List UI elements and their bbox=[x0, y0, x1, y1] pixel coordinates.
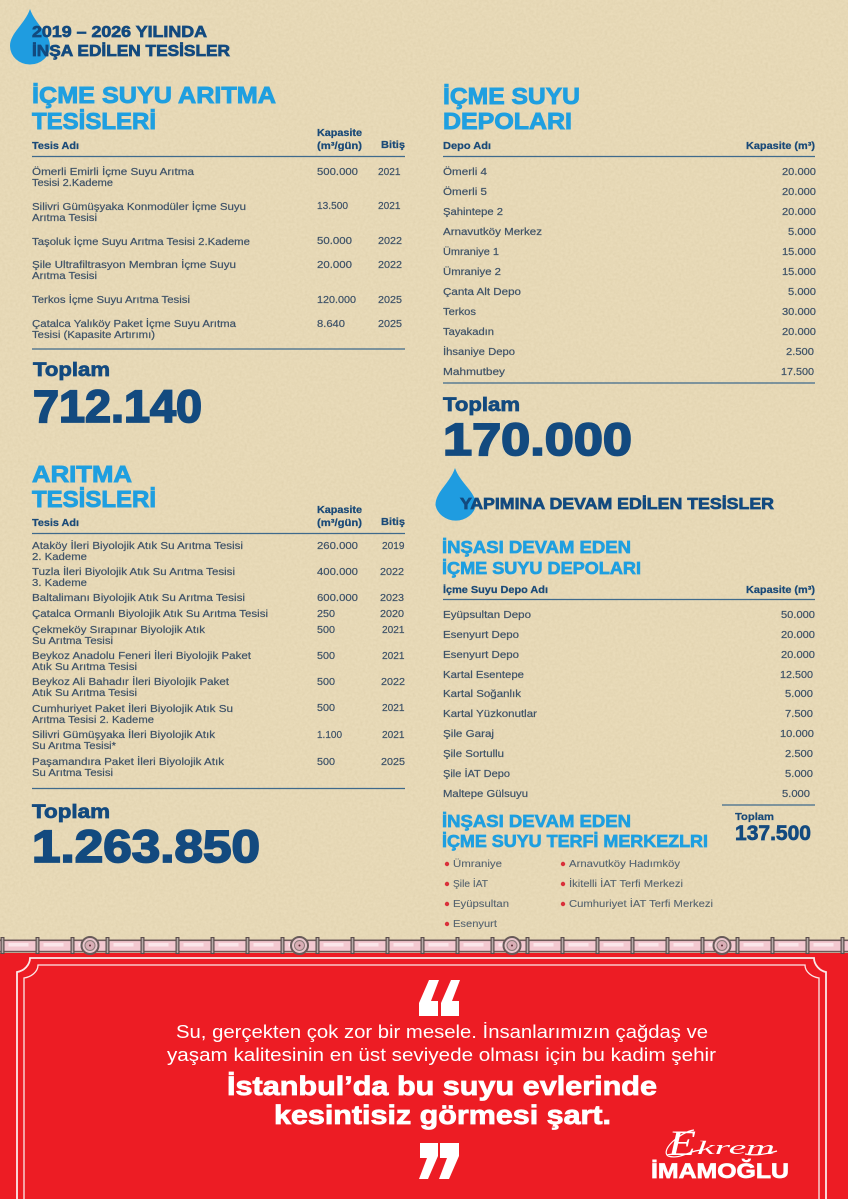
table rows: Şile İAT Depo bbox=[443, 767, 510, 780]
panel: drinking water reservoirs bbox=[443, 83, 816, 465]
table rows: Tayakadın bbox=[443, 327, 494, 338]
bullet list: Esenyurt bbox=[453, 919, 497, 930]
table rows: Su Arıtma Tesisi bbox=[32, 768, 113, 779]
table rows: 15.000 bbox=[782, 247, 816, 258]
table rows: Çatalca Yalıköy Paket İçme Suyu Arıtma bbox=[32, 317, 236, 330]
table header: Kapasite (m³) bbox=[746, 584, 815, 596]
total: Toplam bbox=[33, 360, 110, 381]
table rows: 500 bbox=[317, 651, 335, 662]
heading bbox=[442, 537, 641, 578]
table rows bbox=[32, 165, 405, 349]
quote text: kesintisiz görmesi şart. bbox=[274, 1100, 611, 1130]
table rows: 3. Kademe bbox=[32, 578, 87, 589]
table rows: Şahintepe 2 bbox=[443, 207, 503, 218]
table rows: Çanta Alt Depo bbox=[443, 287, 522, 298]
table rows: Eyüpsultan Depo bbox=[443, 610, 531, 621]
table rows: 1.100 bbox=[317, 730, 342, 741]
signature: İMAMOĞLU bbox=[651, 1158, 789, 1183]
table rows: Şile Sortullu bbox=[443, 749, 504, 760]
table rows: 500 bbox=[317, 625, 335, 636]
table header: Kapasite bbox=[317, 127, 362, 139]
table rows: Silivri Gümüşyaka Konmodüler İçme Suyu bbox=[32, 200, 246, 213]
table rows: 2022 bbox=[381, 677, 405, 688]
table rows: 20.000 bbox=[782, 327, 816, 338]
table rows: 20.000 bbox=[317, 260, 352, 271]
table rows: 30.000 bbox=[782, 307, 816, 318]
table rows: 2021 bbox=[378, 201, 401, 212]
heading: ARITMA bbox=[32, 461, 132, 487]
icon: water drop bbox=[10, 9, 50, 64]
table header: Tesis Adı bbox=[32, 517, 79, 529]
heading: TESİSLERİ bbox=[32, 108, 156, 134]
table header bbox=[443, 140, 815, 156]
table header: (m³/gün) bbox=[317, 140, 362, 152]
bullet list: Cumhuriyet İAT Terfi Merkezi bbox=[569, 897, 713, 910]
total: Toplam bbox=[443, 395, 520, 416]
table rows: 5.000 bbox=[788, 227, 816, 238]
panel: pumping stations under construction bbox=[442, 811, 713, 930]
table rows: 20.000 bbox=[782, 187, 816, 198]
total: Toplam bbox=[32, 802, 110, 823]
table rows: 2021 bbox=[378, 167, 401, 178]
total: Toplam bbox=[735, 811, 774, 823]
table rows: 5.000 bbox=[788, 287, 816, 298]
panel: wastewater treatment plants bbox=[32, 461, 405, 872]
table header: Kapasite bbox=[317, 504, 362, 516]
table rows: Su Arıtma Tesisi bbox=[32, 636, 113, 647]
table rows bbox=[443, 166, 816, 383]
table rows: 250 bbox=[317, 609, 335, 620]
table rows: 20.000 bbox=[781, 650, 815, 661]
icon: opening quote mark bbox=[419, 980, 460, 1016]
table rows: 2022 bbox=[378, 260, 402, 271]
table rows: Terkos bbox=[443, 307, 476, 318]
valve bbox=[504, 937, 520, 954]
table rows: Arıtma Tesisi bbox=[32, 271, 97, 282]
paper background bbox=[0, 0, 848, 955]
main heading: built facilities: 2019 – 2026 YILINDA bbox=[32, 24, 207, 41]
table rows: 20.000 bbox=[782, 207, 816, 218]
table rows: 260.000 bbox=[317, 541, 358, 552]
heading: İÇME SUYU TERFİ MERKEZLRI bbox=[442, 831, 708, 851]
bullet list: Eyüpsultan bbox=[453, 899, 509, 910]
table rows: Maltepe Gülsuyu bbox=[443, 789, 528, 800]
panel: drinking water treatment plants bbox=[32, 82, 405, 432]
main heading: built facilities bbox=[10, 9, 230, 64]
heading bbox=[32, 82, 276, 134]
table rows: 5.000 bbox=[785, 689, 813, 700]
table rows: Su Arıtma Tesisi* bbox=[32, 741, 116, 752]
table rows: Mahmutbey bbox=[443, 367, 505, 378]
table rows: Esenyurt Depo bbox=[443, 630, 519, 641]
table rows: Çekmeköy Sırapınar Biyolojik Atık bbox=[32, 625, 206, 636]
table rows: Paşamandıra Paket İleri Biyolojik Atık bbox=[32, 755, 225, 768]
bullet list: İkitelli İAT Terfi Merkezi bbox=[569, 877, 683, 890]
table rows: 500 bbox=[317, 703, 335, 714]
bullet list: Şile İAT bbox=[453, 877, 488, 890]
heading bbox=[442, 811, 708, 851]
quote text: Su, gerçekten çok zor bir mesele. İnsanlarımızın çağdaş ve bbox=[176, 1021, 708, 1042]
table rows: 2.500 bbox=[786, 347, 814, 358]
quote panel bbox=[0, 953, 848, 1199]
table rows: 12.500 bbox=[780, 670, 813, 681]
heading: İNŞASI DEVAM EDEN bbox=[442, 811, 631, 831]
total bbox=[443, 395, 632, 465]
main heading: built facilities: İNŞA EDİLEN TESİSLER bbox=[32, 42, 230, 60]
table header: Bitiş bbox=[381, 139, 405, 151]
table rows: 10.000 bbox=[780, 729, 814, 740]
table rows: 5.000 bbox=[785, 769, 813, 780]
table rows: Beykoz Ali Bahadır İleri Biyolojik Paket bbox=[32, 675, 229, 688]
valve bbox=[291, 937, 308, 954]
table rows: Arnavutköy Merkez bbox=[443, 227, 542, 238]
table header: İçme Suyu Depo Adı bbox=[443, 583, 548, 596]
table rows: 2022 bbox=[380, 567, 404, 578]
total bbox=[33, 360, 202, 432]
table header: Kapasite (m³) bbox=[746, 140, 815, 152]
total: 712.140 bbox=[33, 381, 202, 432]
heading bbox=[443, 83, 580, 134]
table rows bbox=[443, 610, 815, 805]
heading: İÇME SUYU bbox=[443, 83, 580, 109]
table header: Tesis Adı bbox=[32, 140, 79, 152]
table rows: 50.000 bbox=[317, 236, 352, 247]
table rows: Ümraniye 2 bbox=[443, 266, 501, 278]
table rows: 600.000 bbox=[317, 593, 358, 604]
table rows: 17.500 bbox=[781, 367, 814, 378]
table rows: 20.000 bbox=[781, 630, 815, 641]
table rows: Atık Su Arıtma Tesisi bbox=[32, 662, 137, 673]
table rows: Kartal Esentepe bbox=[443, 670, 524, 681]
table rows: Tesisi 2.Kademe bbox=[32, 178, 113, 189]
icon: closing quote mark bbox=[419, 1143, 459, 1179]
table rows: Kartal Yüzkonutlar bbox=[443, 709, 538, 720]
quote text bbox=[167, 1021, 716, 1130]
section heading: facilities under construction: YAPIMINA DEVAM EDİLEN TESİSLER bbox=[460, 495, 774, 513]
table rows: 2021 bbox=[382, 651, 405, 662]
table rows: 2021 bbox=[382, 703, 405, 714]
table rows: Ümraniye 1 bbox=[443, 246, 499, 258]
icon: water drop bbox=[436, 468, 476, 521]
table rows bbox=[32, 539, 405, 788]
table header: Bitiş bbox=[381, 516, 405, 528]
table rows: Kartal Soğanlık bbox=[443, 689, 522, 700]
heading: İÇME SUYU DEPOLARI bbox=[442, 558, 641, 578]
table rows: Cumhuriyet Paket İleri Biyolojik Atık Su bbox=[32, 702, 233, 715]
table rows: Şile Ultrafiltrasyon Membran İçme Suyu bbox=[32, 258, 236, 271]
table rows: 2. Kademe bbox=[32, 552, 87, 563]
table rows: 2019 bbox=[382, 541, 405, 552]
table rows: 400.000 bbox=[317, 567, 358, 578]
table rows: Ömerli 4 bbox=[443, 166, 487, 178]
table rows: Atık Su Arıtma Tesisi bbox=[32, 688, 137, 699]
valve bbox=[82, 937, 98, 954]
table rows: 50.000 bbox=[781, 610, 815, 621]
table rows: 500 bbox=[317, 677, 335, 688]
total: 1.263.850 bbox=[32, 821, 260, 872]
signature: E bbox=[667, 1123, 696, 1163]
table rows: Arıtma Tesisi 2. Kademe bbox=[32, 715, 154, 726]
table rows: 15.000 bbox=[782, 267, 816, 278]
quote text: yaşam kalitesinin en üst seviyede olması için bu kadim şehir bbox=[167, 1044, 716, 1065]
table rows: Ömerli 5 bbox=[443, 186, 487, 198]
total bbox=[32, 802, 260, 872]
table rows: 5.000 bbox=[782, 789, 810, 800]
table rows: Terkos İçme Suyu Arıtma Tesisi bbox=[32, 293, 190, 306]
table rows: 2025 bbox=[378, 319, 402, 330]
heading: DEPOLARI bbox=[443, 108, 572, 134]
table rows: 2021 bbox=[382, 625, 405, 636]
table rows: 2.500 bbox=[785, 749, 813, 760]
table rows: 500 bbox=[317, 757, 335, 768]
valve bbox=[714, 937, 730, 954]
table rows: 500.000 bbox=[317, 167, 358, 178]
table rows: 2023 bbox=[380, 593, 404, 604]
panel: reservoirs under construction bbox=[442, 537, 815, 845]
table rows: 2025 bbox=[378, 295, 402, 306]
table rows: Tesisi (Kapasite Artırımı) bbox=[32, 330, 155, 341]
table rows: Esenyurt Depo bbox=[443, 650, 519, 661]
signature bbox=[651, 1123, 789, 1183]
table rows: Şile Garaj bbox=[443, 729, 494, 740]
table header: (m³/gün) bbox=[317, 517, 362, 529]
table header: Depo Adı bbox=[443, 140, 491, 152]
table rows: Ömerli Emirli İçme Suyu Arıtma bbox=[32, 165, 194, 178]
heading: İÇME SUYU ARITMA bbox=[32, 82, 276, 108]
table rows: 7.500 bbox=[785, 709, 813, 720]
table rows: Arıtma Tesisi bbox=[32, 213, 97, 224]
table rows: Ataköy İleri Biyolojik Atık Su Arıtma Tesisi bbox=[32, 539, 243, 552]
heading: TESİSLERİ bbox=[32, 486, 156, 512]
table rows: 120.000 bbox=[317, 295, 356, 306]
quote text: İstanbul’da bu suyu evlerinde bbox=[227, 1071, 657, 1101]
heading bbox=[32, 461, 156, 512]
heading: İNŞASI DEVAM EDEN bbox=[442, 537, 631, 557]
bullet list: Ümraniye bbox=[453, 858, 502, 870]
table rows: Taşoluk İçme Suyu Arıtma Tesisi 2.Kademe bbox=[32, 235, 250, 248]
table rows: 2020 bbox=[380, 609, 404, 620]
table rows: 20.000 bbox=[782, 167, 816, 178]
table rows: 2021 bbox=[382, 730, 405, 741]
table header bbox=[32, 504, 405, 534]
table header bbox=[443, 583, 815, 600]
table rows: Tuzla İleri Biyolojik Atık Su Arıtma Tesisi bbox=[32, 565, 235, 578]
total bbox=[735, 811, 811, 845]
signature: krem bbox=[697, 1138, 775, 1159]
bullet list: Arnavutköy Hadımköy bbox=[569, 859, 680, 870]
table rows: Baltalimanı Biyolojik Atık Su Arıtma Tesisi bbox=[32, 593, 245, 604]
table rows: 8.640 bbox=[317, 319, 345, 330]
total: 170.000 bbox=[443, 414, 632, 465]
table header bbox=[32, 127, 405, 156]
table rows: Beykoz Anadolu Feneri İleri Biyolojik Paket bbox=[32, 649, 251, 662]
total: 137.500 bbox=[735, 822, 811, 845]
bullet list bbox=[445, 858, 713, 930]
table rows: Çatalca Ormanlı Biyolojik Atık Su Arıtma Tesisi bbox=[32, 609, 268, 620]
section heading: facilities under construction bbox=[436, 468, 774, 521]
table rows: Silivri Gümüşyaka İleri Biyolojik Atık bbox=[32, 728, 216, 741]
table rows: 2022 bbox=[378, 236, 402, 247]
decorative pipe with valves bbox=[0, 937, 848, 955]
table rows: 2025 bbox=[381, 757, 405, 768]
table rows: 13.500 bbox=[317, 201, 348, 212]
table rows: İhsaniye Depo bbox=[443, 345, 515, 358]
